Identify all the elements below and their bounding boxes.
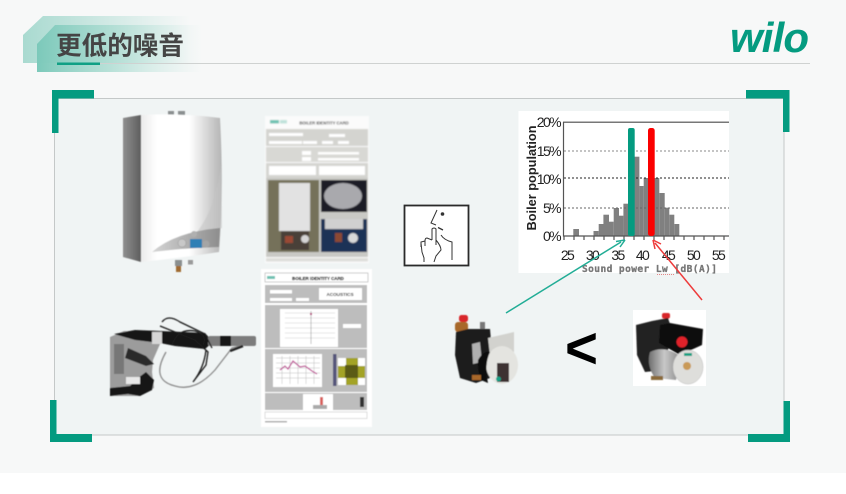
x axis tick labels: 55 xyxy=(712,247,726,263)
green marker bar xyxy=(628,128,635,236)
y axis title: Boiler population xyxy=(524,125,539,230)
data sheet: inspection form: BOILER IDENTITY CARD xyxy=(299,120,349,126)
x axis tick labels: 40 xyxy=(636,247,650,263)
title underline xyxy=(57,62,100,65)
raised finger and hand xyxy=(421,228,441,262)
y axis tick labels xyxy=(537,114,561,244)
neck and shoulder line xyxy=(441,235,452,260)
icon: silence gesture xyxy=(404,206,468,266)
x axis tick labels: 35 xyxy=(611,247,625,263)
x axis and ticks xyxy=(564,122,729,240)
y axis tick labels: 0% xyxy=(543,228,561,244)
title: 更低的噪音 xyxy=(56,30,184,60)
corner bracket bottom left xyxy=(50,400,92,442)
face profile xyxy=(431,210,437,225)
data sheet: acoustics card: ACOUSTICS xyxy=(326,292,354,297)
y axis tick labels: 15% xyxy=(537,143,561,159)
wilo logo: wilo xyxy=(730,14,809,61)
corner bracket bottom right xyxy=(748,401,790,442)
top axis line xyxy=(563,122,729,123)
y axis tick labels: 20% xyxy=(537,114,561,130)
data sheet: inspection form xyxy=(265,116,369,263)
header xyxy=(23,16,810,72)
x axis title: Sound power Lw [dB(A)] xyxy=(582,264,717,275)
red marker bar xyxy=(648,128,655,236)
header rule xyxy=(100,63,810,64)
corner bracket top right xyxy=(746,90,790,132)
older louder pump photo xyxy=(633,310,706,386)
x axis tick labels xyxy=(561,247,726,263)
y axis tick labels: 10% xyxy=(537,171,561,187)
bar chart: sound power distribution xyxy=(518,111,729,275)
x axis tick labels: 30 xyxy=(586,247,600,263)
less-than symbol: < xyxy=(565,316,598,381)
x axis tick labels: 50 xyxy=(687,247,701,263)
microphone photo xyxy=(110,318,256,396)
arrow: green to quiet value xyxy=(506,240,625,313)
histogram bars xyxy=(573,157,679,236)
new quiet pump photo xyxy=(455,315,518,384)
spelling underline xyxy=(657,274,674,276)
main panel xyxy=(54,98,784,435)
data sheet: acoustics card xyxy=(261,269,372,427)
eye xyxy=(441,213,444,215)
corner bracket top left xyxy=(52,90,94,133)
dashed grid lines xyxy=(564,150,729,152)
x axis tick labels: 45 xyxy=(662,247,676,263)
boiler photo xyxy=(123,111,222,272)
arrow: red to louder value xyxy=(653,240,702,300)
data sheet: acoustics card: BOILER IDENTITY CARD xyxy=(292,276,344,281)
header ribbon front xyxy=(37,25,202,72)
x axis tick labels: 25 xyxy=(561,247,575,263)
y axis tick labels: 5% xyxy=(543,200,561,216)
header ribbon back xyxy=(23,16,190,63)
mouth xyxy=(438,228,443,230)
